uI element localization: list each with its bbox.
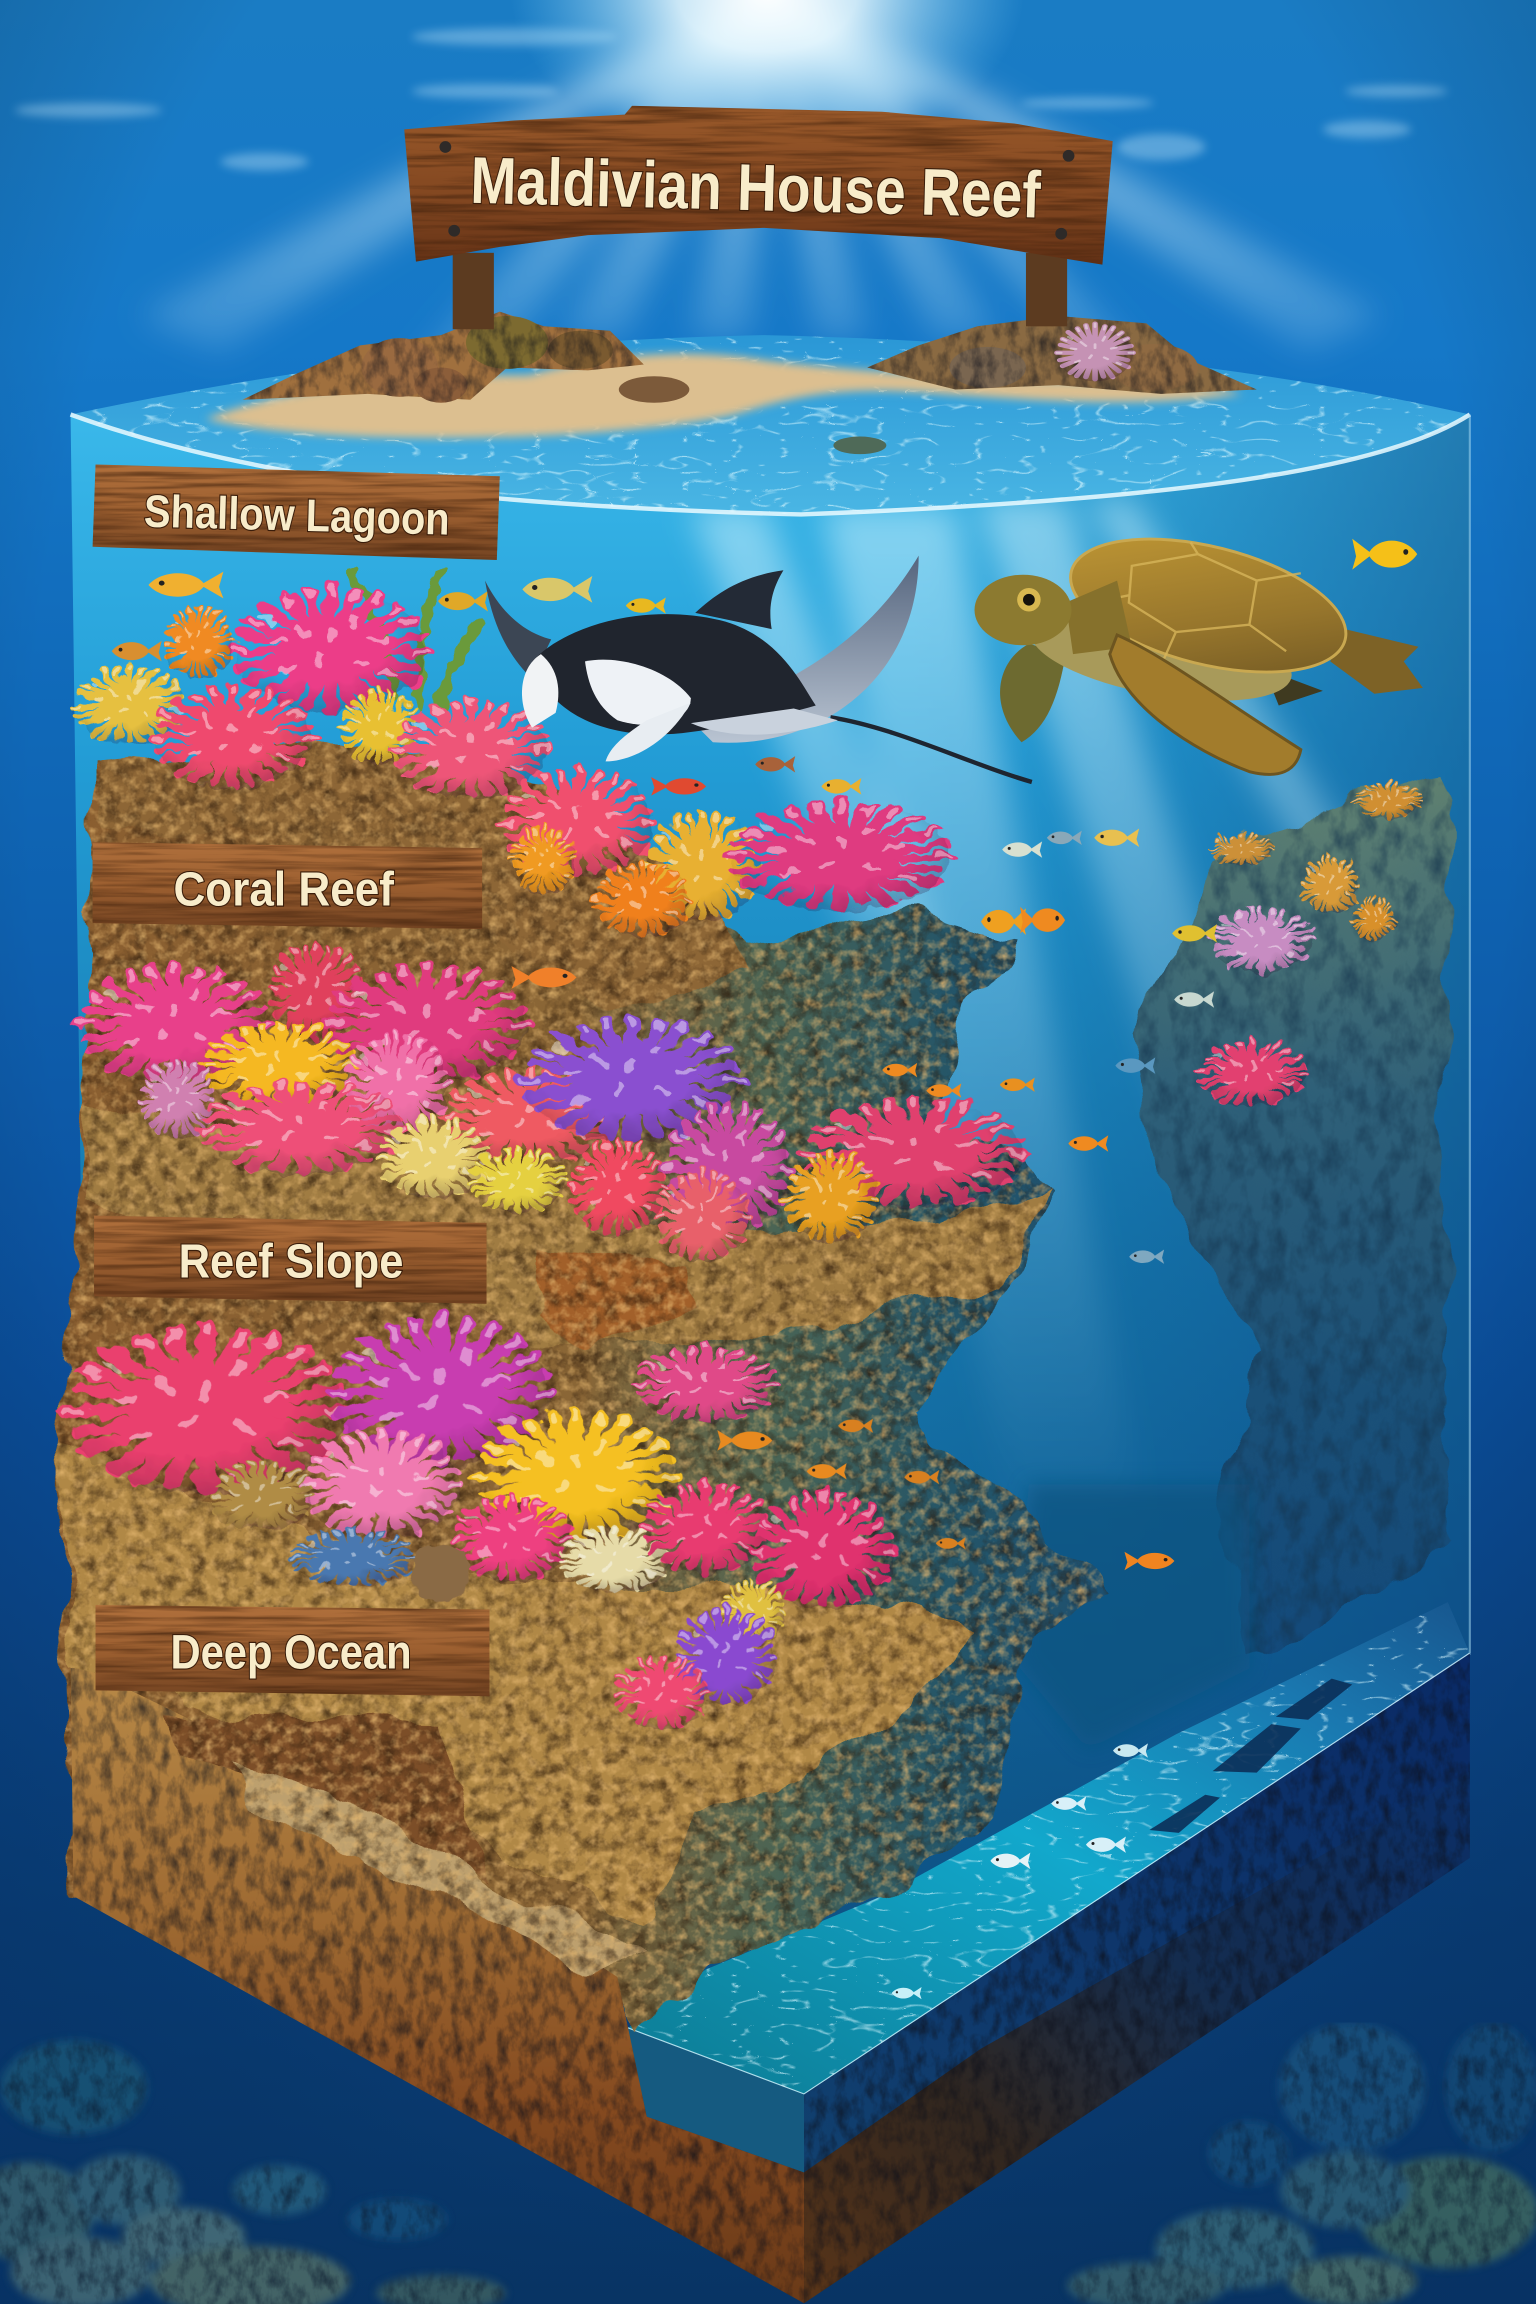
small fish — [112, 539, 1417, 1999]
reef terraces — [59, 742, 1058, 1977]
reef cliff mass — [59, 750, 1105, 2028]
rocks left — [243, 312, 644, 403]
small coral on island — [1057, 324, 1133, 381]
far wall corals — [1198, 783, 1424, 1105]
sign posts — [453, 253, 1067, 329]
glass block front faces — [628, 1654, 1470, 2172]
lower earth block front — [71, 1661, 804, 2303]
corals: coral reef terrace — [80, 944, 1022, 1423]
kelp — [353, 573, 478, 706]
label: Shallow Lagoon: Shallow Lagoon — [143, 486, 450, 545]
water column of the cutaway block — [71, 414, 1470, 2095]
title sign — [404, 106, 1113, 329]
label: Deep Ocean — [96, 1605, 489, 1696]
label: Coral Reef: Coral Reef — [173, 862, 395, 916]
rocks right — [867, 316, 1257, 394]
background: sea floor rocks — [0, 2023, 1536, 2304]
label: Reef Slope — [94, 1216, 487, 1304]
lower base: right side — [804, 1771, 1470, 2303]
corals: shallow lagoon terrace — [75, 573, 950, 936]
sea turtle — [975, 514, 1423, 774]
label: Coral Reef — [93, 842, 482, 929]
label: Reef Slope: Reef Slope — [179, 1234, 403, 1288]
title: Maldivian House Reef — [470, 144, 1042, 233]
label: Deep Ocean: Deep Ocean — [171, 1625, 412, 1679]
label: Shallow Lagoon — [93, 464, 500, 560]
corals: reef slope terrace — [67, 1317, 893, 1729]
sand island — [206, 312, 1257, 454]
water surface — [71, 335, 1470, 1654]
far reef wall — [1014, 779, 1448, 1749]
sea floor: turquoise shelf — [628, 1602, 1470, 2095]
manta ray — [485, 556, 1032, 782]
sign board — [404, 106, 1113, 265]
sign bolts — [439, 141, 1074, 240]
background: sun rays — [140, 0, 1382, 441]
